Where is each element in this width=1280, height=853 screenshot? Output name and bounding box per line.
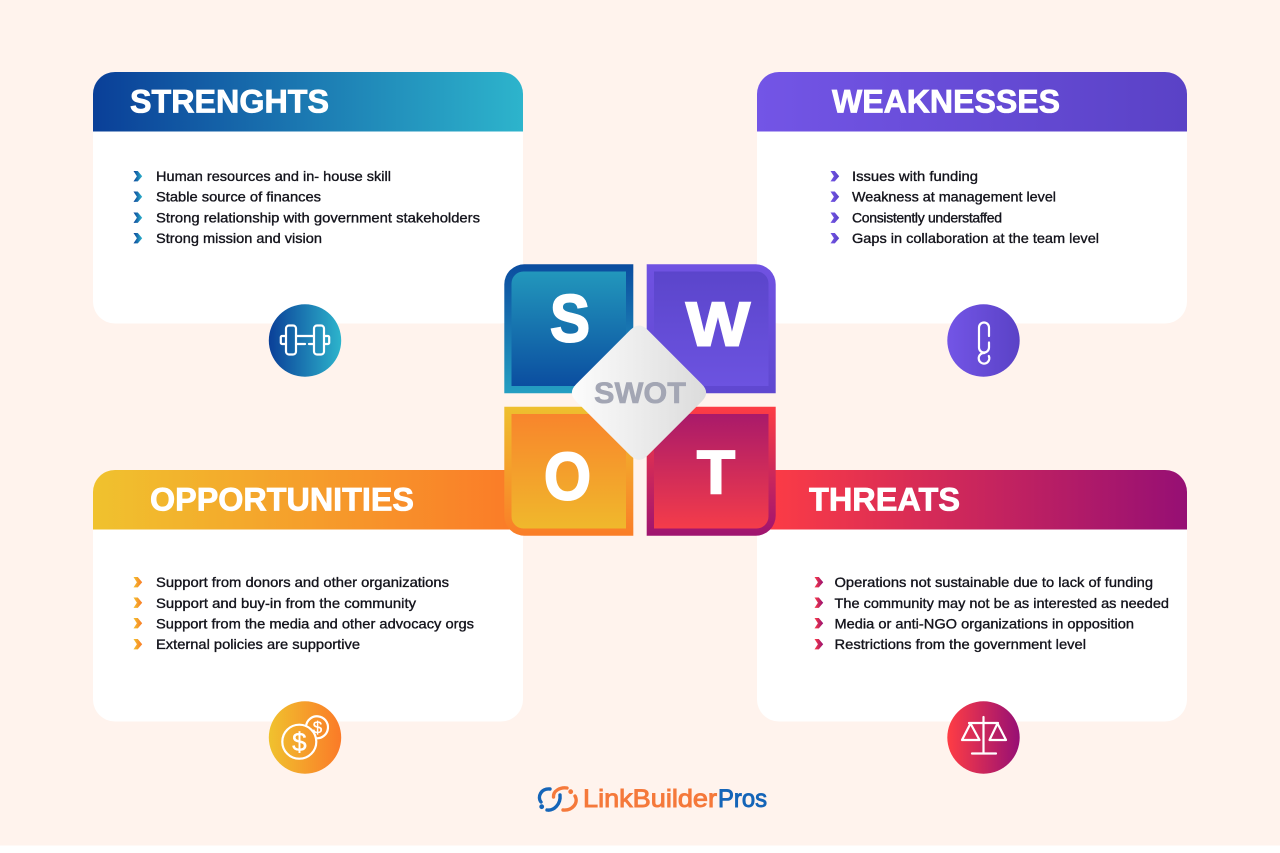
heading: threats [757, 470, 1187, 530]
panel: opportunities [93, 470, 523, 722]
icon: dollar coins [269, 701, 341, 774]
heading: strengths: STRENGHTS [130, 84, 329, 120]
panel: threats [757, 470, 1187, 722]
centre diamond [572, 326, 706, 460]
icon: dollar coins: $ [292, 727, 307, 757]
logo: LinkBuilderPros: LinkBuilder [583, 785, 717, 813]
list: weaknesses: Weakness at management level [852, 188, 1056, 204]
tile: S [504, 264, 633, 393]
heading: opportunities [93, 470, 523, 530]
tile: T [647, 407, 776, 536]
logo: LinkBuilderPros: Pros [718, 785, 767, 813]
tile: T: T [697, 438, 735, 506]
list: opportunities: Support from donors and other organizations [156, 574, 449, 590]
list: weaknesses: Issues with funding [852, 168, 978, 184]
list: strengths: Strong mission and vision [156, 230, 322, 246]
list: strengths: Strong relationship with government stakeholders [156, 210, 480, 226]
heading: strengths [93, 72, 523, 132]
logo: LinkBuilderPros [539, 785, 767, 813]
icon: broken chain link [947, 304, 1020, 377]
centre diamond: SWOT [594, 377, 686, 410]
heading: weaknesses: WEAKNESSES [832, 84, 1060, 120]
list: threats: Operations not sustainable due to lack of funding [834, 574, 1153, 590]
tile: W: W [686, 290, 751, 360]
icon: dollar coins: $ [313, 718, 323, 737]
list: opportunities: External policies are supportive [156, 636, 360, 652]
icon: dumbbell [269, 304, 341, 377]
list: threats: Media or anti-NGO organizations in opposition [834, 616, 1134, 632]
list: weaknesses [830, 168, 1099, 246]
list: threats: Restrictions from the government level [834, 636, 1086, 652]
heading: weaknesses [757, 72, 1187, 132]
panel: weaknesses [757, 72, 1187, 324]
tile: S: S [550, 282, 590, 356]
list: opportunities: Support and buy-in from the community [156, 595, 416, 611]
list: opportunities [134, 574, 474, 652]
swot centre graphic [504, 264, 776, 536]
tile: O: O [544, 440, 591, 514]
tile: O [504, 407, 633, 536]
list: strengths: Human resources and in- house skill [156, 168, 391, 184]
list: weaknesses: Consistently understaffed [852, 210, 1002, 226]
list: threats: The community may not be as interested as needed [834, 595, 1169, 611]
list: strengths: Stable source of finances [156, 188, 321, 204]
panel: strengths [93, 72, 523, 324]
icon: balance scales [947, 701, 1020, 774]
list: threats [814, 574, 1169, 652]
list: strengths [134, 168, 480, 246]
heading: threats: THREATS [809, 482, 960, 518]
tile: W [647, 264, 776, 393]
list: weaknesses: Gaps in collaboration at the team level [852, 230, 1099, 246]
list: opportunities: Support from the media and other advocacy orgs [156, 616, 474, 632]
heading: opportunities: OPPORTUNITIES [150, 482, 414, 518]
